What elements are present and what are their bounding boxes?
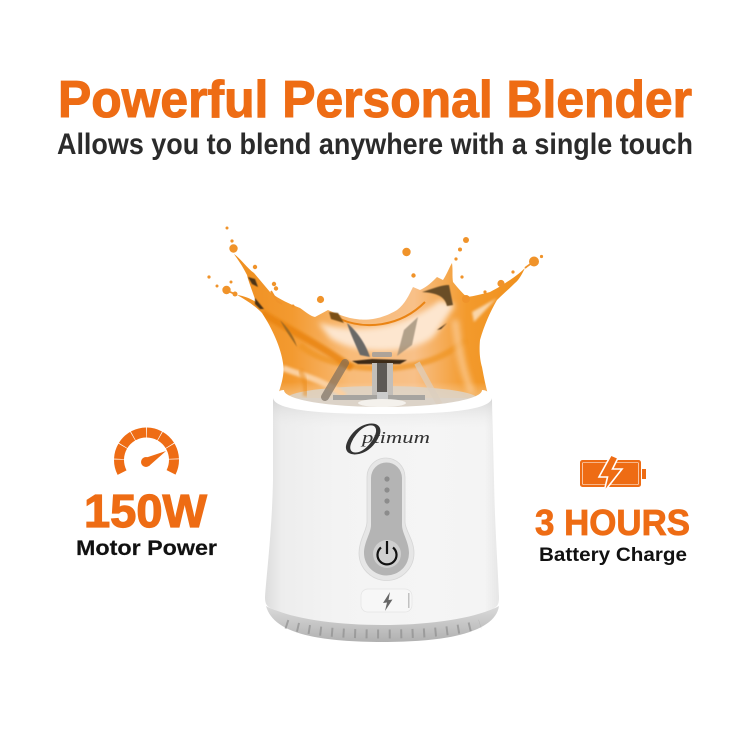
value: 3 hours: 3 HOURS xyxy=(535,502,690,543)
base with vents xyxy=(266,606,499,642)
logo xyxy=(336,414,430,465)
left feature: motor power xyxy=(76,423,217,560)
rim xyxy=(273,390,492,414)
housing xyxy=(265,398,499,625)
control panel xyxy=(359,458,414,580)
droplets xyxy=(207,226,543,308)
logo: ptimum xyxy=(361,428,430,447)
logo: O xyxy=(336,414,389,465)
blade assembly xyxy=(325,352,440,405)
blade hub xyxy=(358,399,406,407)
cup interior xyxy=(286,386,478,412)
tendrils xyxy=(226,262,534,304)
blender body xyxy=(265,352,499,642)
title: Powerful Personal Blender xyxy=(58,71,692,129)
icon: battery xyxy=(580,455,646,492)
shadow below rim xyxy=(273,398,492,430)
icon: speedometer xyxy=(110,423,183,497)
power button xyxy=(373,540,401,568)
label: motor power: Motor Power xyxy=(76,537,217,560)
juice splash xyxy=(207,226,543,412)
charge switch xyxy=(361,589,412,612)
subtitle: Allows you to blend anywhere with a single touch xyxy=(57,128,693,161)
label: battery charge: Battery Charge xyxy=(539,544,687,566)
right feature: battery charge xyxy=(535,455,690,566)
value: 150W: 150W xyxy=(84,485,208,537)
dark splash shadows xyxy=(248,277,453,364)
